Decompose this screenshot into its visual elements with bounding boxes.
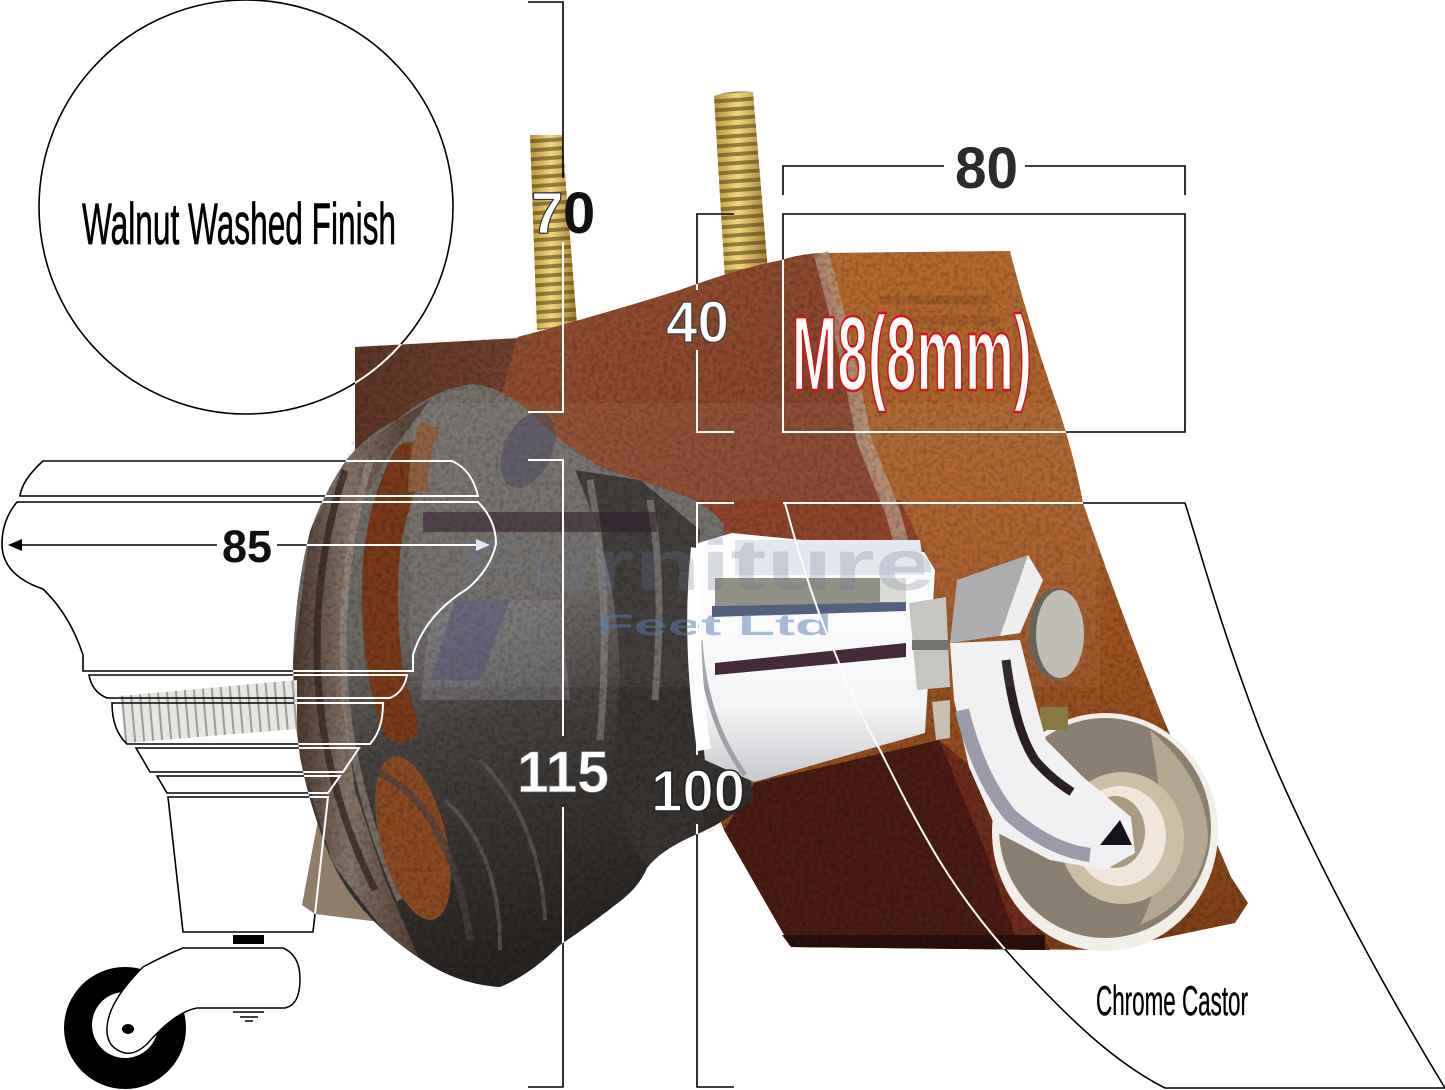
dimension 40: 40 bbox=[666, 290, 729, 355]
dimension 100: 100 bbox=[651, 759, 745, 824]
dimension 70: 0 bbox=[563, 181, 595, 246]
dimension 85: 85 bbox=[222, 521, 272, 572]
threaded bolt: right bbox=[714, 92, 768, 280]
icon: castor line drawing bbox=[64, 948, 300, 1089]
chrome castor neck and nut bbox=[909, 597, 950, 740]
wood grain texture bbox=[290, 240, 1260, 990]
label: Chrome Castor: Chrome Castor bbox=[1096, 977, 1248, 1024]
watermark logo: Furniture bbox=[460, 526, 935, 606]
chrome castor screw head bbox=[1029, 588, 1084, 680]
arrow head: right of 85 bbox=[476, 539, 490, 551]
wooden leg: rear block bbox=[302, 338, 580, 922]
label: Walnut Washed Finish: Walnut Washed Finish bbox=[82, 192, 396, 257]
castor mount block bbox=[233, 935, 264, 944]
chrome castor bracket bbox=[950, 555, 1135, 870]
wooden leg: front wedge bbox=[500, 251, 1248, 950]
chrome castor ferrule bbox=[690, 533, 935, 782]
dimension 115: 115 bbox=[517, 740, 609, 805]
wooden knob bbox=[285, 375, 765, 995]
chrome castor wheel bbox=[992, 713, 1218, 951]
dimension 70: 7 bbox=[531, 181, 563, 246]
dimension 70 bbox=[531, 181, 595, 246]
dimension and outline lines, white over photo bbox=[293, 242, 1084, 949]
shaft bolt, silver bbox=[120, 680, 297, 743]
arrow head: left of 85 bbox=[8, 539, 22, 551]
watermark logo bbox=[410, 403, 1100, 687]
watermark logo: Feet Ltd bbox=[597, 609, 832, 642]
dimension 80: 80 bbox=[955, 136, 1018, 201]
label: M8 thread size: M8(8mm) bbox=[792, 295, 1032, 413]
threaded bolt: left bbox=[530, 135, 577, 330]
